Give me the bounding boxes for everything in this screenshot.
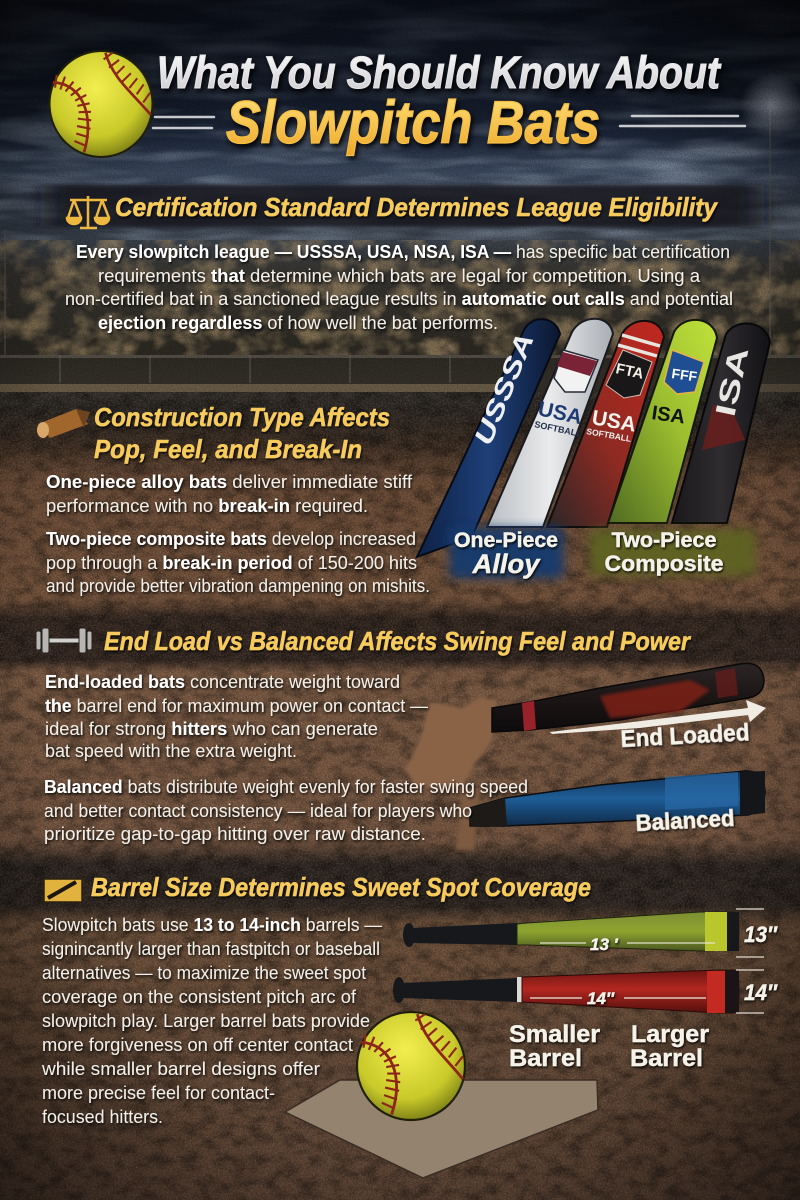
title <box>157 47 722 156</box>
body text: signincantly larger than fastpitch or baseball <box>42 939 380 959</box>
body text: One-piece alloy bats deliver immediate stiff <box>46 472 413 492</box>
body text: alternatives — to maximize the sweet spot <box>42 963 366 983</box>
balanced bat <box>470 771 765 826</box>
bat: red <box>547 321 664 527</box>
body text: Every slowpitch league — USSSA, USA, NSA, ISA — has specific bat certification <box>76 242 730 262</box>
heading <box>94 402 390 464</box>
body text: more precise feel for contact- <box>42 1083 275 1103</box>
label: larger barrel <box>630 1021 709 1072</box>
body text: requirements that determine which bats are legal for competition. Using a <box>98 266 701 286</box>
icon: dumbbell <box>36 628 92 653</box>
body text: non-certified bat in a sanctioned league results in automatic out calls and potential <box>65 289 733 309</box>
label: larger barrel: Larger <box>631 1021 709 1048</box>
bat: green <box>608 320 717 523</box>
softball on plate <box>357 1012 465 1120</box>
label patch: two-piece composite <box>590 529 755 576</box>
hand under balanced bat <box>455 790 480 850</box>
title: What You Should Know About <box>157 47 722 98</box>
body text: slowpitch play. Larger barrel bats provide <box>42 1011 370 1031</box>
label patch: one-piece alloy: Alloy <box>471 549 542 579</box>
bat: navy: USSSA <box>468 329 540 449</box>
label: end loaded: End Loaded <box>620 719 750 753</box>
label patch: one-piece alloy: One-Piece <box>454 529 558 552</box>
bat: white <box>487 319 613 527</box>
bat: white: SOFTBALL <box>534 419 583 439</box>
13-inch bat <box>403 912 739 954</box>
heading: Barrel Size Determines Sweet Spot Coverage <box>91 872 591 902</box>
heading: End Load vs Balanced Affects Swing Feel and Power <box>104 626 692 656</box>
14-inch bat <box>393 970 739 1013</box>
bat: black <box>672 324 770 523</box>
body text <box>44 672 528 844</box>
13-inch bat: 13 ′ <box>590 935 619 954</box>
body text: while smaller barrel designs offer <box>41 1059 320 1079</box>
arrow: end-load direction <box>550 700 766 734</box>
heading band <box>30 185 775 227</box>
body text: and better contact consistency — ideal for players who <box>44 801 472 821</box>
bat: navy <box>417 319 560 557</box>
body text: and provide better vibration dampening on mishits. <box>46 576 430 596</box>
label: smaller barrel: Smaller <box>509 1021 600 1048</box>
bat: black: ISA <box>710 344 754 419</box>
14-inch bat: 14″ <box>587 989 615 1008</box>
bat: red: USA <box>590 406 638 437</box>
bats group <box>417 319 770 557</box>
icon: wood log <box>37 409 90 438</box>
panel: end load vs balanced <box>36 626 766 850</box>
body text: bat speed with the extra weight. <box>45 741 297 761</box>
body text: performance with no break-in required. <box>46 496 368 516</box>
body text <box>65 242 733 333</box>
label: balanced: Balanced <box>635 805 735 836</box>
body text <box>41 915 382 1127</box>
body text: focused hitters. <box>42 1107 163 1127</box>
hand gripping bat <box>405 697 497 788</box>
label: smaller barrel <box>509 1021 600 1072</box>
body text: prioritize gap-to-gap hitting over raw distance. <box>44 824 426 844</box>
label: larger barrel: Barrel <box>630 1045 703 1072</box>
body text: pop through a break-in period of 150-200 hits <box>46 553 417 573</box>
body text: the barrel end for maximum power on contact — <box>45 696 428 716</box>
body text: Two-piece composite bats develop increased <box>46 529 416 549</box>
title: Slowpitch Bats <box>226 89 600 156</box>
bat: green: FFF <box>671 365 699 385</box>
label patch: one-piece alloy <box>450 528 563 579</box>
bat: white: USA <box>536 397 584 429</box>
body text <box>46 472 430 596</box>
size labels: 13″ <box>744 922 778 947</box>
panel: certification <box>30 185 775 333</box>
icon: scales <box>67 196 109 228</box>
panel: construction type <box>37 319 770 596</box>
body text: more forgiveness on off center contact <box>42 1035 353 1055</box>
label patch: two-piece composite: Two-Piece <box>612 529 716 552</box>
body text: ejection regardless of how well the bat performs. <box>98 313 498 333</box>
body text: ideal for strong hitters who can generate <box>45 719 378 739</box>
body text: Slowpitch bats use 13 to 14-inch barrels — <box>42 915 382 935</box>
home plate <box>285 1080 598 1178</box>
size labels <box>744 922 778 1005</box>
body text: Balanced bats distribute weight evenly for faster swing speed <box>44 777 528 797</box>
panel: barrel size <box>41 872 778 1178</box>
body text: End-loaded bats concentrate weight toward <box>45 672 400 692</box>
size labels: 14″ <box>744 980 778 1005</box>
heading: Construction Type Affects <box>94 402 390 432</box>
softball icon by title <box>48 49 154 159</box>
bat: red: FTA <box>614 360 645 383</box>
bat: green: ISA <box>650 402 686 429</box>
bat: red: SOFTBALL <box>586 426 632 444</box>
dimension ticks <box>736 909 764 1013</box>
heading: Certification Standard Determines League Eligibility <box>115 192 718 222</box>
label: smaller barrel: Barrel <box>509 1045 582 1072</box>
icon: barrel badge <box>44 879 82 902</box>
heading: Pop, Feel, and Break-In <box>94 434 362 464</box>
body text: coverage on the consistent pitch arc of <box>42 987 357 1007</box>
label patch: two-piece composite: Composite <box>604 551 724 576</box>
end-loaded bat <box>492 663 764 732</box>
speed lines <box>153 116 745 128</box>
